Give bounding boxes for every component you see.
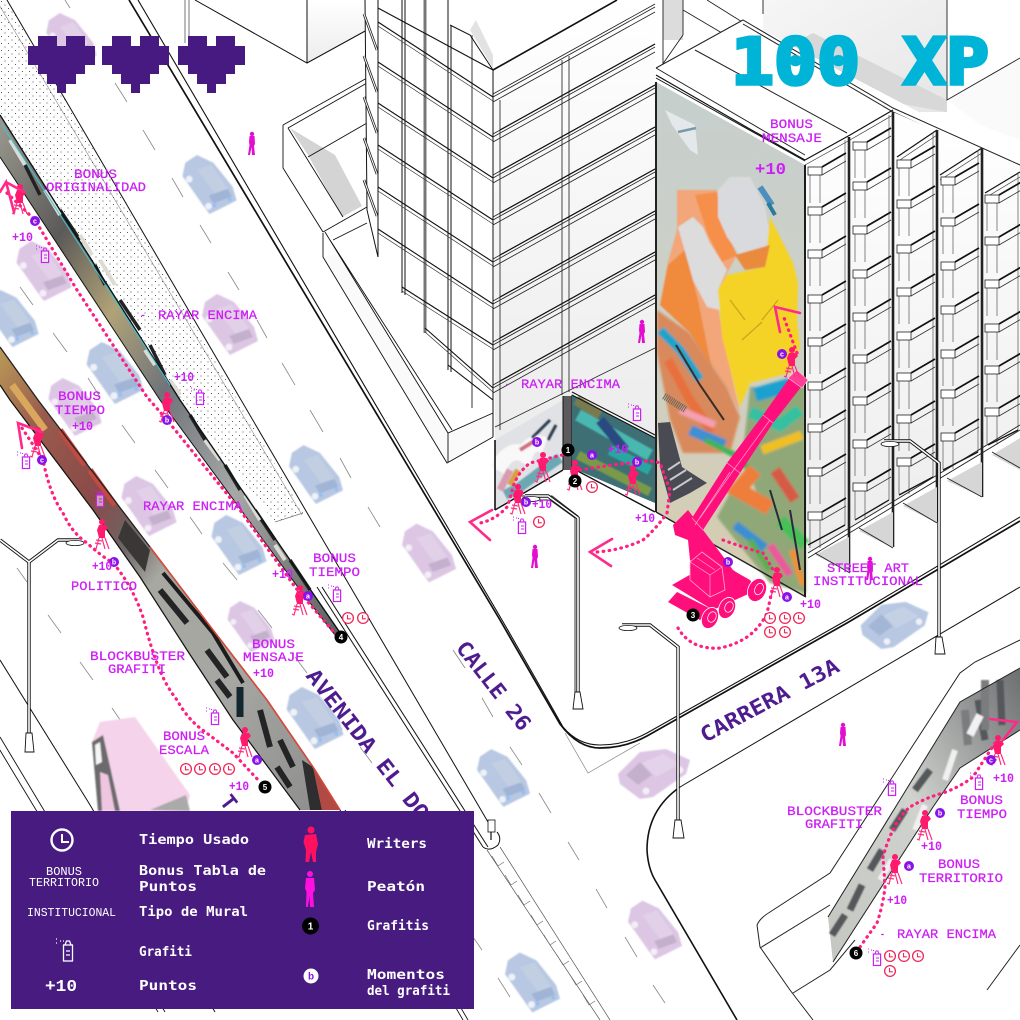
label: bonus territorio: +10 — [921, 839, 942, 854]
label: blockbuster grafiti right: BLOCKBUSTER — [787, 804, 882, 819]
label: bonus tiempo 4: +10 — [272, 567, 293, 582]
label: rayar encima building: - — [505, 377, 510, 392]
label: bonus escala: BONUS — [163, 729, 205, 744]
legend icon: moment marker — [304, 968, 318, 984]
legend: puntos: Puntos — [139, 978, 197, 994]
label: bonus mensaje left: BONUS — [252, 637, 295, 652]
background building top left — [195, 0, 367, 63]
label: bonus tiempo 4: TIEMPO — [309, 565, 360, 580]
label: bonus territorio: +10 — [887, 893, 907, 908]
label: rayar encima right: - — [880, 927, 885, 942]
moment badges: a — [785, 594, 789, 602]
upper right background buildings — [660, 0, 1020, 140]
moment badges: a — [907, 864, 911, 870]
score heading: 100 XP: 100 XP — [731, 26, 989, 100]
crane — [668, 370, 808, 631]
time clocks — [181, 482, 923, 976]
graffiti number markers: 2 — [573, 477, 578, 486]
dotted graffiti routes — [7, 193, 997, 947]
label: bonus mensaje left: MENSAJE — [243, 650, 304, 665]
legend icon: graffiti marker — [302, 918, 319, 934]
points labels at low murals — [532, 442, 655, 526]
legend: bonus tabla de puntos — [139, 863, 266, 895]
tower right facade — [493, 0, 655, 440]
lower right mural strip — [828, 668, 1020, 962]
legend icon: graffiti marker: 1 — [308, 922, 314, 932]
legend sample: bonus territorio: TERRITORIO — [29, 877, 99, 890]
right building facade with modular bays — [805, 110, 1020, 573]
label: rayar encima building: RAYAR ENCIMA — [521, 377, 620, 392]
label: bonus mensaje left: +10 — [253, 666, 274, 681]
moment badges: b — [535, 440, 539, 446]
label: bonus tiempo right: BONUS — [960, 793, 1003, 808]
label: street art institucional: +10 — [800, 597, 821, 612]
label: street art institucional: INSTITUCIONAL — [813, 574, 923, 589]
panel: legend — [11, 811, 474, 1009]
legend: bonus tabla de puntos: Bonus Tabla de — [139, 863, 266, 879]
label: bonus originalidad: BONUS — [74, 167, 117, 182]
label: bonus territorio: TERRITORIO — [919, 871, 1003, 886]
moment badges: b — [635, 460, 639, 466]
label: bonus mensaje left — [243, 637, 304, 681]
legend: tiempo usado: Tiempo Usado — [139, 832, 249, 848]
legend icon: writer — [304, 826, 318, 862]
graffiti number markers: 4 — [339, 633, 344, 642]
street lamps — [0, 441, 945, 838]
moment badges: b — [165, 418, 169, 424]
main mural: figure embracing — [656, 78, 806, 597]
label: bonus originalidad — [12, 167, 146, 245]
label: street art institucional: STREET ART — [827, 561, 909, 576]
label: rayar encima top: - — [140, 308, 146, 323]
label: bonus mensaje right: MENSAJE — [762, 131, 822, 146]
label: rayar encima right: RAYAR ENCIMA — [897, 927, 996, 942]
graffiti number markers: 5 — [263, 783, 268, 792]
legend: grafitis: Grafitis — [367, 918, 429, 934]
mural strip: top avenue — [0, 115, 345, 640]
points labels at low murals: +10 — [608, 442, 628, 457]
legend icon: moment marker: b — [308, 972, 314, 982]
legend icon: clock — [52, 830, 72, 850]
label: bonus escala — [159, 729, 249, 794]
label: rayar encima top: RAYAR ENCIMA — [158, 308, 257, 323]
legend sample: bonus territorio — [29, 866, 99, 890]
label: bonus tiempo left: +10 — [72, 419, 93, 434]
low murals at tower base — [495, 392, 655, 700]
moment badges: c — [40, 458, 44, 464]
legend: grafiti: Grafiti — [139, 944, 192, 960]
label: rayar encima middle: RAYAR ENCIMA — [143, 499, 242, 514]
label: bonus originalidad: +10 — [12, 230, 33, 245]
tower left facade — [364, 0, 493, 413]
legend: peaton: Peatón — [367, 879, 425, 895]
legend: writers: Writers — [367, 836, 427, 852]
moment badges: a — [590, 452, 594, 460]
moment badges: a — [255, 758, 259, 764]
label: bonus escala: +10 — [229, 779, 249, 794]
label: blockbuster grafiti right — [787, 804, 882, 832]
legend icon: spray can — [56, 939, 72, 961]
legend icon: pedestrian — [305, 871, 315, 907]
moment badges: c — [780, 352, 784, 358]
legend: momentos del grafiti: Momentos — [367, 967, 445, 983]
lives: pixel hearts — [28, 36, 245, 93]
lane markings — [17, 0, 665, 1003]
spray cans — [17, 246, 983, 966]
street name: Calle 26: CALLE 26 — [451, 636, 536, 735]
label: bonus tiempo left: TIEMPO — [55, 403, 105, 418]
graffiti number markers — [258, 444, 862, 960]
graffiti number markers: 1 — [566, 446, 571, 455]
moment badges: b — [726, 560, 730, 566]
street name: Carrera 13A: CARRERA 13A — [696, 654, 844, 747]
label: bonus mensaje right: BONUS — [770, 117, 813, 132]
lower right block outlines — [757, 640, 1020, 1020]
label: bonus mensaje right — [755, 117, 822, 180]
label: rayar encima top: +10 — [174, 370, 194, 385]
writers on ladders — [12, 184, 1005, 884]
moment badges: c — [33, 218, 37, 226]
legend sample: +10: +10 — [45, 978, 77, 997]
legend sample: bonus territorio: BONUS — [46, 866, 82, 879]
tower podium — [283, 78, 493, 463]
label: bonus tiempo right: +10 — [993, 771, 1014, 786]
points labels at low murals: +10 — [532, 497, 552, 512]
route arrows — [0, 182, 1017, 740]
label: blockbuster grafiti left — [90, 649, 185, 677]
dotted median — [0, 0, 303, 522]
points labels at low murals: +10 — [635, 511, 655, 526]
legend: momentos del grafiti: del grafiti — [367, 983, 450, 999]
label: bonus territorio — [887, 839, 1003, 908]
street name fragment behind legend: T — [215, 790, 242, 815]
label: bonus territorio: BONUS — [938, 857, 980, 872]
label: bonus tiempo 4 — [272, 551, 360, 582]
label: politico: POLITICO — [71, 579, 137, 594]
right building roof — [656, 20, 1020, 193]
graffiti number markers: 3 — [691, 611, 696, 620]
graffiti number markers: 6 — [854, 949, 859, 958]
label: bonus tiempo left — [55, 389, 105, 434]
moment badges: b — [112, 560, 116, 566]
legend: bonus tabla de puntos: Puntos — [139, 879, 197, 895]
label: bonus tiempo right: TIEMPO — [957, 807, 1007, 822]
label: politico: +10 — [92, 559, 112, 574]
moment badges: a — [306, 594, 310, 600]
label: bonus mensaje right: +10 — [755, 161, 786, 180]
label: bonus tiempo left: BONUS — [58, 389, 101, 404]
label: blockbuster grafiti right: GRAFITI — [805, 817, 863, 832]
street name: Avenida El Dorado: AVENIDA EL DO — [301, 664, 434, 825]
legend: momentos del grafiti — [367, 967, 450, 999]
moment badges — [30, 216, 996, 871]
label: bonus originalidad: ORIGINALIDAD — [46, 180, 146, 195]
moment badges: b — [524, 500, 528, 506]
label: blockbuster grafiti left: BLOCKBUSTER — [90, 649, 185, 664]
label: rayar encima top — [140, 308, 257, 385]
label: bonus tiempo 4: BONUS — [313, 551, 356, 566]
label: bonus escala: ESCALA — [159, 743, 209, 758]
label: street art institucional — [800, 561, 923, 612]
legend: tipo de mural: Tipo de Mural — [139, 904, 248, 920]
moment badges: b — [938, 810, 942, 818]
label: politico — [71, 559, 137, 594]
mural strip: lower avenue — [0, 347, 340, 810]
moment badges: c — [989, 758, 993, 764]
label: blockbuster grafiti left: GRAFITI — [108, 662, 166, 677]
pedestrians — [248, 132, 873, 746]
legend sample: institucional: INSTITUCIONAL — [27, 907, 116, 920]
label: bonus tiempo right — [957, 771, 1014, 822]
